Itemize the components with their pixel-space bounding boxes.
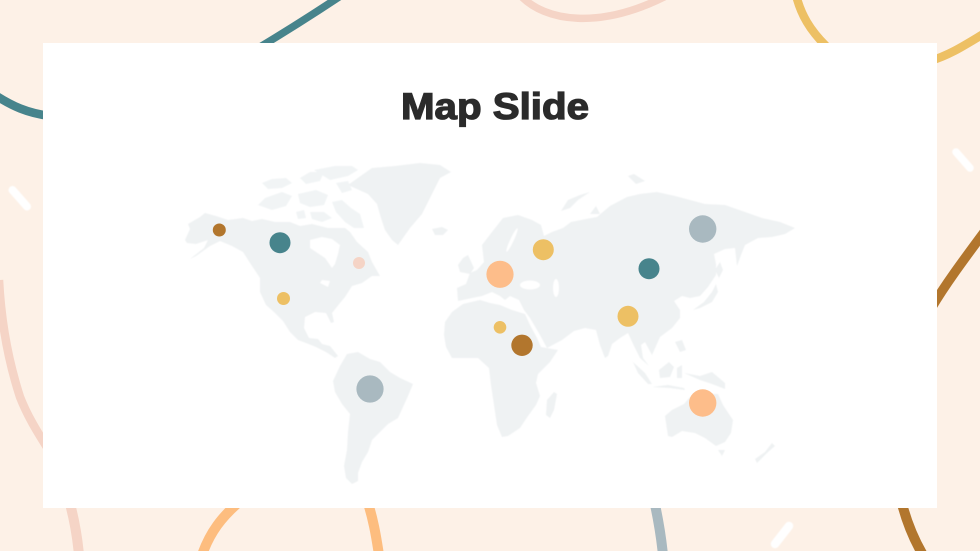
map: North America <box>185 213 380 358</box>
decorative white dashes <box>12 152 970 544</box>
marker: Brazil <box>356 375 384 403</box>
map: Japan and Sakhalin <box>693 262 723 310</box>
map: Novaya Zemlya and Svalbard <box>561 174 645 214</box>
map: South America <box>333 352 413 484</box>
map: Madagascar <box>546 392 557 418</box>
map: Indonesia and Philippines <box>633 340 725 390</box>
map: Arctic islands <box>258 166 364 228</box>
world map <box>185 163 795 484</box>
marker: Eastern Russia <box>689 215 716 243</box>
title: Map Slide <box>401 86 589 127</box>
marker: Central Africa <box>511 335 533 356</box>
map markers <box>213 215 716 417</box>
map: Iceland <box>432 227 448 235</box>
map: Eurasia <box>457 192 795 366</box>
map: Greenland <box>348 163 451 245</box>
marker: Alaska <box>213 224 226 236</box>
marker: Mongolia <box>638 258 660 279</box>
marker: United States <box>277 292 290 305</box>
panel: white card <box>43 43 937 508</box>
map: New Zealand <box>755 443 775 463</box>
marker: North Africa <box>494 321 506 334</box>
map: Africa <box>444 300 558 437</box>
marker: Australia <box>689 389 716 417</box>
map: United Kingdom <box>458 255 474 274</box>
marker: Canada <box>270 232 290 253</box>
marker: Eastern Europe <box>533 239 554 260</box>
map water cut-outs <box>310 227 559 306</box>
marker: China <box>618 306 638 327</box>
marker: Western Europe <box>486 261 514 288</box>
map: Australia <box>665 394 733 456</box>
marker: Quebec <box>353 257 365 269</box>
